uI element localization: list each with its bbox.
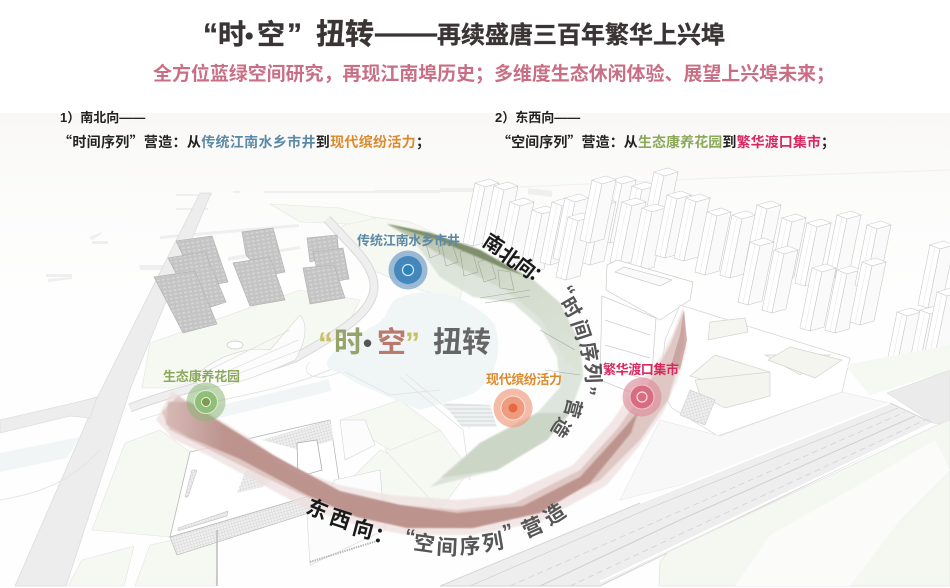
grey residential blocks <box>154 228 349 333</box>
curved label: north-south: 营 <box>559 396 586 420</box>
curved label: east-west: 间 <box>436 536 458 560</box>
curved label: north-south: “ <box>555 282 579 302</box>
heading: north-south: 1）南北向—— <box>60 110 145 125</box>
curved label: east-west: 东 <box>303 494 331 525</box>
curved label: north-south: 造 <box>546 413 575 441</box>
label: eco garden: 生态康养花园 <box>163 369 240 384</box>
centre title: ” <box>405 327 420 360</box>
main title <box>203 17 725 51</box>
left main road <box>15 193 211 586</box>
main title: 空 <box>257 19 285 50</box>
curved label: north-south <box>479 229 604 441</box>
curved label: east-west: “ <box>403 525 417 549</box>
node: modern vitality <box>494 388 532 428</box>
curved label: east-west: 空 <box>412 530 436 557</box>
centre title: • <box>363 328 372 358</box>
curved label: north-south: 向 <box>510 252 540 283</box>
main title: 再续盛唐三百年繁华上兴埠 <box>437 22 725 49</box>
text: time sequence: “时间序列”营造：从传统江南水乡市井到现代缤纷活力； <box>58 132 430 152</box>
label: traditional water town: 传统江南水乡市井 <box>357 233 460 248</box>
water canal left <box>0 437 80 472</box>
curved label: north-south: 序 <box>575 340 603 364</box>
curved label: north-south: ” <box>576 383 600 397</box>
green lots <box>68 204 470 586</box>
main title: 扭转 <box>316 18 374 51</box>
label: ferry market: 繁华渡口集市 <box>603 362 679 377</box>
curved label: north-south: 间 <box>566 317 595 343</box>
centre title: “ <box>318 327 333 360</box>
curved label: east-west: ： <box>371 524 397 550</box>
cross street east <box>887 370 950 425</box>
node: ferry market <box>622 378 662 416</box>
main title: 时 <box>218 19 246 50</box>
curved label: north-south: 南 <box>479 229 508 260</box>
lake <box>327 292 498 410</box>
main title: • <box>245 23 253 50</box>
centre title: 扭转 <box>433 326 491 359</box>
white towers cluster <box>463 168 950 375</box>
shopping mall <box>660 305 850 436</box>
bottom avenue <box>440 403 933 586</box>
main title: “ <box>203 18 218 51</box>
main title: —— <box>375 17 437 50</box>
curved label: north-south: 时 <box>555 293 585 322</box>
ribbon: north-south green <box>387 224 583 487</box>
curved label: east-west: 序 <box>459 535 481 559</box>
centre title: 空 <box>377 326 406 359</box>
terrace steps <box>443 403 497 427</box>
curved label: east-west: 西 <box>326 506 354 534</box>
curved label: east-west <box>303 494 570 560</box>
centre title: 时 <box>334 326 363 359</box>
curved road around lake <box>130 219 374 408</box>
museum building <box>170 420 385 586</box>
ribbon: east-west red <box>156 307 687 535</box>
curved label: north-south: ： <box>524 263 554 293</box>
curved label: east-west: 营 <box>519 513 547 543</box>
heading: east-west: 2）东西向—— <box>495 110 580 125</box>
faint roads top left <box>46 188 710 282</box>
podium building <box>600 260 693 400</box>
curved label: north-south: 北 <box>494 242 524 273</box>
node: eco garden <box>186 382 226 422</box>
curved label: east-west: 向 <box>350 516 376 544</box>
text: space sequence: “空间序列”营造：从生态康养花园到繁华渡口集市； <box>497 132 835 152</box>
east green lot <box>659 420 950 586</box>
curved label: north-south: 列 <box>581 363 604 383</box>
subtitle: 全方位蓝绿空间研究，再现江南埠历史；多维度生态休闲体验、展望上兴埠未来； <box>153 62 835 85</box>
main title: ” <box>287 18 302 51</box>
curved label: east-west: 造 <box>540 500 570 530</box>
curved label: east-west: ” <box>500 520 516 544</box>
lakeside paths <box>0 362 470 500</box>
paved plaza <box>620 392 888 500</box>
node: traditional water town <box>388 250 428 290</box>
curved label: east-west: 列 <box>481 530 505 556</box>
label: modern vitality: 现代缤纷活力 <box>486 372 562 387</box>
centre title <box>318 326 491 360</box>
